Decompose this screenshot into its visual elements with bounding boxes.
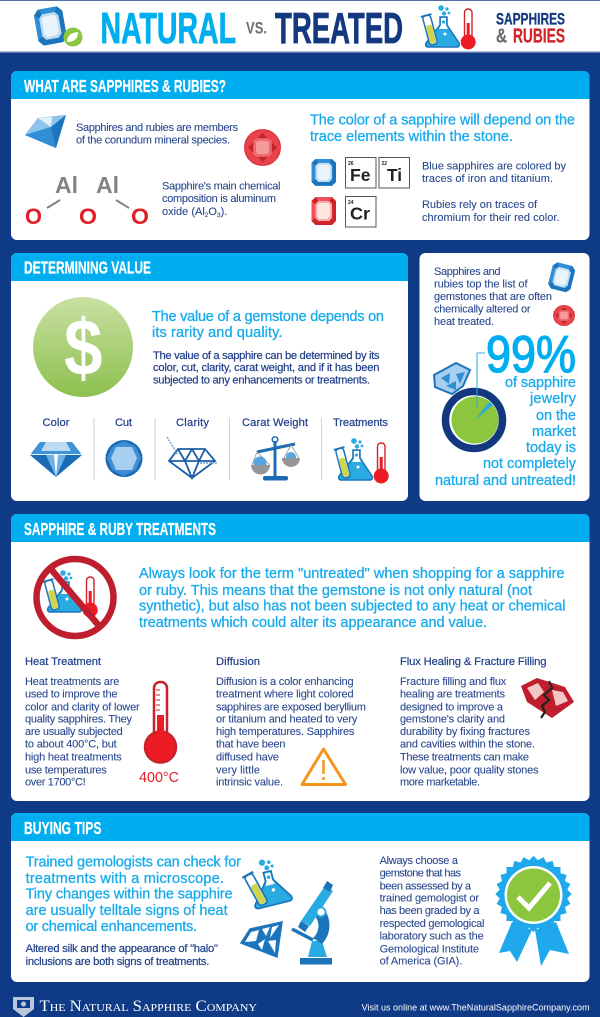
column: flux healing and fracture filling: Flux Healing & Fracture Filling bbox=[400, 656, 546, 668]
column: diffusion: high temperatures. Sapphires bbox=[216, 726, 355, 738]
diagram: aluminum oxide: O bbox=[79, 204, 97, 229]
text: corundum: Sapphires and rubies are members bbox=[76, 122, 238, 134]
column: flux healing and fracture filling: healing are treatments bbox=[400, 689, 506, 701]
text: chemical composition: oxide (Al bbox=[162, 206, 205, 218]
text: sapphire jewelry statistic: on the bbox=[536, 408, 576, 424]
factor: clarity: Clarity bbox=[176, 417, 209, 429]
panel: what are sapphires and rubies bbox=[11, 71, 590, 240]
column: heat treatment: Heat treatments are bbox=[25, 676, 119, 688]
logo crest bbox=[13, 997, 34, 1017]
text: chemical composition: Sapphire's main chemical bbox=[162, 180, 280, 192]
text: sapphire jewelry statistic: of sapphire bbox=[505, 375, 576, 391]
element tile: Cr bbox=[346, 196, 376, 227]
text: chemical composition: 2 bbox=[205, 212, 209, 219]
icon: certified rosette bbox=[495, 856, 572, 966]
text: value factors: color, cut, clarity, carat weight, and if it has been bbox=[153, 362, 380, 374]
element tile: Cr: Cr bbox=[350, 204, 370, 224]
text: altered silk bbox=[26, 943, 218, 968]
panel: buying tips bbox=[11, 813, 590, 982]
text: chemical composition: ). bbox=[221, 206, 227, 218]
label: 400 degrees: 400°C bbox=[139, 769, 179, 786]
diagram: aluminum oxide: Al bbox=[55, 172, 78, 198]
icon: sapphire bbox=[312, 159, 336, 186]
callout: gemologists: Trained gemologists can check for bbox=[26, 855, 241, 871]
element tile: Ti: Ti bbox=[387, 165, 402, 185]
text: corundum: of the corundum mineral species. bbox=[76, 134, 230, 146]
element tile: Fe bbox=[346, 158, 376, 188]
text: top of the list: Sapphires and bbox=[434, 266, 500, 278]
column: diffusion: Diffusion bbox=[216, 656, 260, 668]
text: rubies: chromium for their red color. bbox=[422, 212, 560, 224]
callout: gemologists: are usually telltale signs of heat bbox=[26, 903, 228, 919]
element tile: Ti bbox=[379, 158, 410, 188]
text: chemical composition: O bbox=[208, 206, 217, 218]
column: heat treatment: color and clarity of lower bbox=[25, 701, 140, 713]
text: sapphire jewelry statistic: today is bbox=[526, 440, 576, 456]
subtitle: sapphires and rubies: SAPPHIRES bbox=[496, 10, 565, 28]
subtitle: sapphires and rubies: RUBIES bbox=[513, 26, 565, 48]
panel: sapphire and ruby treatments bbox=[11, 514, 590, 801]
icon: lab flask and thermometer bbox=[421, 5, 476, 49]
column: heat treatment: are usually subjected bbox=[25, 726, 123, 738]
subtitle: sapphires and rubies: & bbox=[496, 26, 507, 48]
text: top of the list: gemstones that are often bbox=[434, 291, 552, 303]
icon: no treatments sign bbox=[36, 559, 114, 636]
text: altered silk: Altered silk and the appearance of "halo" bbox=[26, 943, 218, 955]
column: flux healing and fracture filling: low value, poor quality stones bbox=[400, 764, 539, 776]
callout: look for untreated: Always look for the term "untreated" when shopping for a sapphire bbox=[139, 566, 564, 582]
factor: carat weight bbox=[242, 417, 309, 480]
column: diffusion bbox=[216, 656, 366, 788]
callout: look for untreated: or ruby. This means that the gemstone is not only natural (not bbox=[139, 583, 532, 599]
column: flux healing and fracture filling: durability by fixing fractures bbox=[400, 726, 530, 738]
text: choose a gemstone: trained gemologist or bbox=[380, 892, 479, 904]
column: flux healing and fracture filling: and cavities within the stone. bbox=[400, 739, 535, 751]
text: rubies: Rubies rely on traces of bbox=[422, 199, 538, 211]
callout: gemologists: treatments with a microscope. bbox=[26, 871, 224, 887]
text: choose a gemstone: has been graded by a bbox=[380, 905, 480, 917]
column: diffusion: intrinsic value. bbox=[216, 776, 283, 788]
column: heat treatment: use temperatures bbox=[25, 764, 107, 776]
text: choose a gemstone: laboratory such as the bbox=[380, 931, 484, 943]
text: top of the list: rubies top the list of bbox=[434, 279, 528, 291]
text: blue sapphires: Blue sapphires are colored by bbox=[422, 160, 566, 172]
factor: clarity bbox=[167, 417, 217, 478]
statistic: 99 percent: 99% bbox=[486, 326, 576, 384]
text: value factors: subjected to any enhancements or treatments. bbox=[153, 375, 370, 387]
icon: thermometer bbox=[145, 682, 176, 762]
icon: dollar coin bbox=[33, 297, 133, 397]
icon: dollar coin: $ bbox=[64, 303, 102, 392]
text: chemical composition bbox=[162, 180, 280, 219]
diagram: aluminum oxide bbox=[25, 172, 149, 229]
column: diffusion: diffused have bbox=[216, 751, 279, 763]
icon: ruby bbox=[312, 197, 336, 225]
column: heat treatment: over 1700°C! bbox=[25, 776, 86, 788]
callout: rarity and quality: The value of a gemstone depends on bbox=[152, 309, 384, 325]
heading: BUYING TIPS bbox=[24, 818, 101, 838]
panel: 99 percent bbox=[420, 253, 590, 501]
text: sapphire jewelry statistic: market bbox=[532, 424, 576, 440]
element tile: Cr: 24 bbox=[348, 200, 354, 206]
factor: color bbox=[30, 417, 82, 477]
icon: ruby bbox=[553, 305, 575, 326]
column: diffusion: very little bbox=[216, 764, 260, 776]
text: sapphire jewelry statistic bbox=[435, 375, 577, 489]
title: treated: TREATED bbox=[275, 4, 403, 53]
text: altered silk: inclusions are both signs of treatments. bbox=[26, 956, 209, 968]
callout: gemologists: or chemical enhancements. bbox=[26, 919, 197, 935]
factor: treatments bbox=[333, 417, 389, 484]
column: heat treatment: Heat Treatment bbox=[25, 656, 102, 668]
website: Visit us online at www.TheNaturalSapphireCompany.com bbox=[362, 1003, 590, 1014]
icon: natural sapphire with leaf bbox=[33, 6, 82, 46]
factor: treatments: Treatments bbox=[333, 417, 388, 429]
factor: cut: Cut bbox=[115, 417, 133, 429]
icon: round ruby bbox=[244, 129, 281, 166]
callout: look for untreated: treatments which could alter its appearance and value. bbox=[139, 615, 487, 631]
text: top of the list: heat treated. bbox=[434, 316, 494, 328]
icon: sapphire bbox=[547, 262, 576, 293]
icon: treated gem bbox=[434, 363, 470, 394]
icon: warning triangle bbox=[302, 749, 346, 784]
column: diffusion: or titanium and heated to very bbox=[216, 713, 358, 725]
company name: The Natural Sapphire Company bbox=[40, 998, 257, 1015]
text: blue sapphires bbox=[422, 160, 566, 185]
callout: rarity and quality: its rarity and quality. bbox=[152, 325, 282, 341]
element tile: Fe: 26 bbox=[348, 161, 354, 167]
callout: trace elements bbox=[310, 112, 575, 145]
callout: gemologists: Tiny changes within the sapphire bbox=[26, 887, 233, 903]
text: corundum bbox=[76, 122, 238, 146]
callout: look for untreated: synthetic), but also has not been subjected to any heat or chemical bbox=[139, 599, 566, 615]
column: flux healing and fracture filling: designed to improve a bbox=[400, 701, 504, 713]
text: blue sapphires: traces of iron and titanium. bbox=[422, 173, 553, 185]
panel: determining value bbox=[11, 253, 408, 501]
column: flux healing and fracture filling: gemstone's clarity and bbox=[400, 713, 505, 725]
callout: trace elements: The color of a sapphire will depend on the bbox=[310, 112, 575, 128]
text: top of the list bbox=[434, 266, 552, 328]
heading: SAPPHIRE & RUBY TREATMENTS bbox=[24, 519, 216, 539]
icon: microscope bbox=[292, 881, 333, 964]
text: choose a gemstone: gemstone that has bbox=[380, 868, 462, 880]
column: heat treatment: to about 400°C, but bbox=[25, 739, 117, 751]
text: choose a gemstone: Gemological Institute bbox=[380, 943, 479, 955]
text: sapphire jewelry statistic: natural and untreated! bbox=[435, 473, 576, 489]
text: rubies bbox=[422, 199, 560, 224]
callout: trace elements: trace elements within the stone. bbox=[310, 129, 513, 145]
subtitle: sapphires and rubies bbox=[496, 10, 565, 48]
icon: blue diamond bbox=[25, 115, 66, 148]
factor: color: Color bbox=[42, 417, 70, 429]
text: chemical composition: composition is aluminum bbox=[162, 193, 276, 205]
text: sapphire jewelry statistic: jewelry bbox=[529, 391, 577, 407]
factor: carat weight: Carat Weight bbox=[242, 417, 309, 429]
column: flux healing and fracture filling: Fracture filling and flux bbox=[400, 676, 507, 688]
title: vs: VS. bbox=[246, 18, 267, 38]
column: diffusion: Diffusion is a color enhancing bbox=[216, 676, 354, 688]
icon: diamond outline bbox=[241, 922, 282, 957]
column: heat treatment: quality sapphires. They bbox=[25, 713, 132, 725]
text: sapphire jewelry statistic: not completely bbox=[483, 456, 577, 472]
column: flux healing and fracture filling: more marketable. bbox=[400, 776, 480, 788]
column: diffusion: treatment where light colored bbox=[216, 689, 354, 701]
diagram: aluminum oxide: O bbox=[131, 204, 149, 229]
text: choose a gemstone bbox=[380, 855, 484, 967]
text: choose a gemstone: respected gemological bbox=[380, 918, 484, 930]
column: heat treatment: used to improve the bbox=[25, 689, 118, 701]
icon: cracked ruby bbox=[521, 678, 574, 718]
text: choose a gemstone: Always choose a bbox=[380, 855, 459, 867]
callout: rarity and quality bbox=[152, 309, 384, 341]
column: diffusion: that have been bbox=[216, 739, 286, 751]
text: top of the list: chemically altered or bbox=[434, 303, 531, 315]
column: flux healing and fracture filling: These treatments can make bbox=[400, 751, 529, 763]
callout: look for untreated bbox=[139, 566, 566, 631]
text: value factors: The value of a sapphire can be determined by its bbox=[153, 350, 380, 362]
factor: cut bbox=[106, 417, 142, 477]
text: chemical composition: 3 bbox=[217, 212, 221, 219]
title: natural: NATURAL bbox=[100, 4, 236, 53]
element tile: Fe: Fe bbox=[350, 165, 371, 185]
column: heat treatment: high heat treatments bbox=[25, 751, 122, 763]
diagram: aluminum oxide: Al bbox=[96, 172, 119, 198]
chart: 99 percent pie ring bbox=[446, 353, 502, 448]
header banner bbox=[0, 0, 600, 53]
column: flux healing and fracture filling bbox=[400, 656, 546, 788]
heading: WHAT ARE SAPPHIRES & RUBIES? bbox=[24, 76, 226, 96]
element tile: Ti: 22 bbox=[382, 161, 387, 167]
footer bbox=[13, 997, 590, 1017]
column: heat treatment bbox=[25, 656, 140, 788]
text: choose a gemstone: been assessed by a bbox=[380, 880, 472, 892]
heading: DETERMINING VALUE bbox=[24, 258, 151, 278]
callout: gemologists bbox=[26, 855, 241, 935]
column: diffusion: sapphires are exposed beryllium bbox=[216, 701, 366, 713]
icon: flask bbox=[239, 855, 293, 911]
text: value factors bbox=[153, 350, 380, 387]
diagram: aluminum oxide: O bbox=[25, 204, 42, 229]
text: choose a gemstone: of America (GIA). bbox=[380, 955, 462, 967]
